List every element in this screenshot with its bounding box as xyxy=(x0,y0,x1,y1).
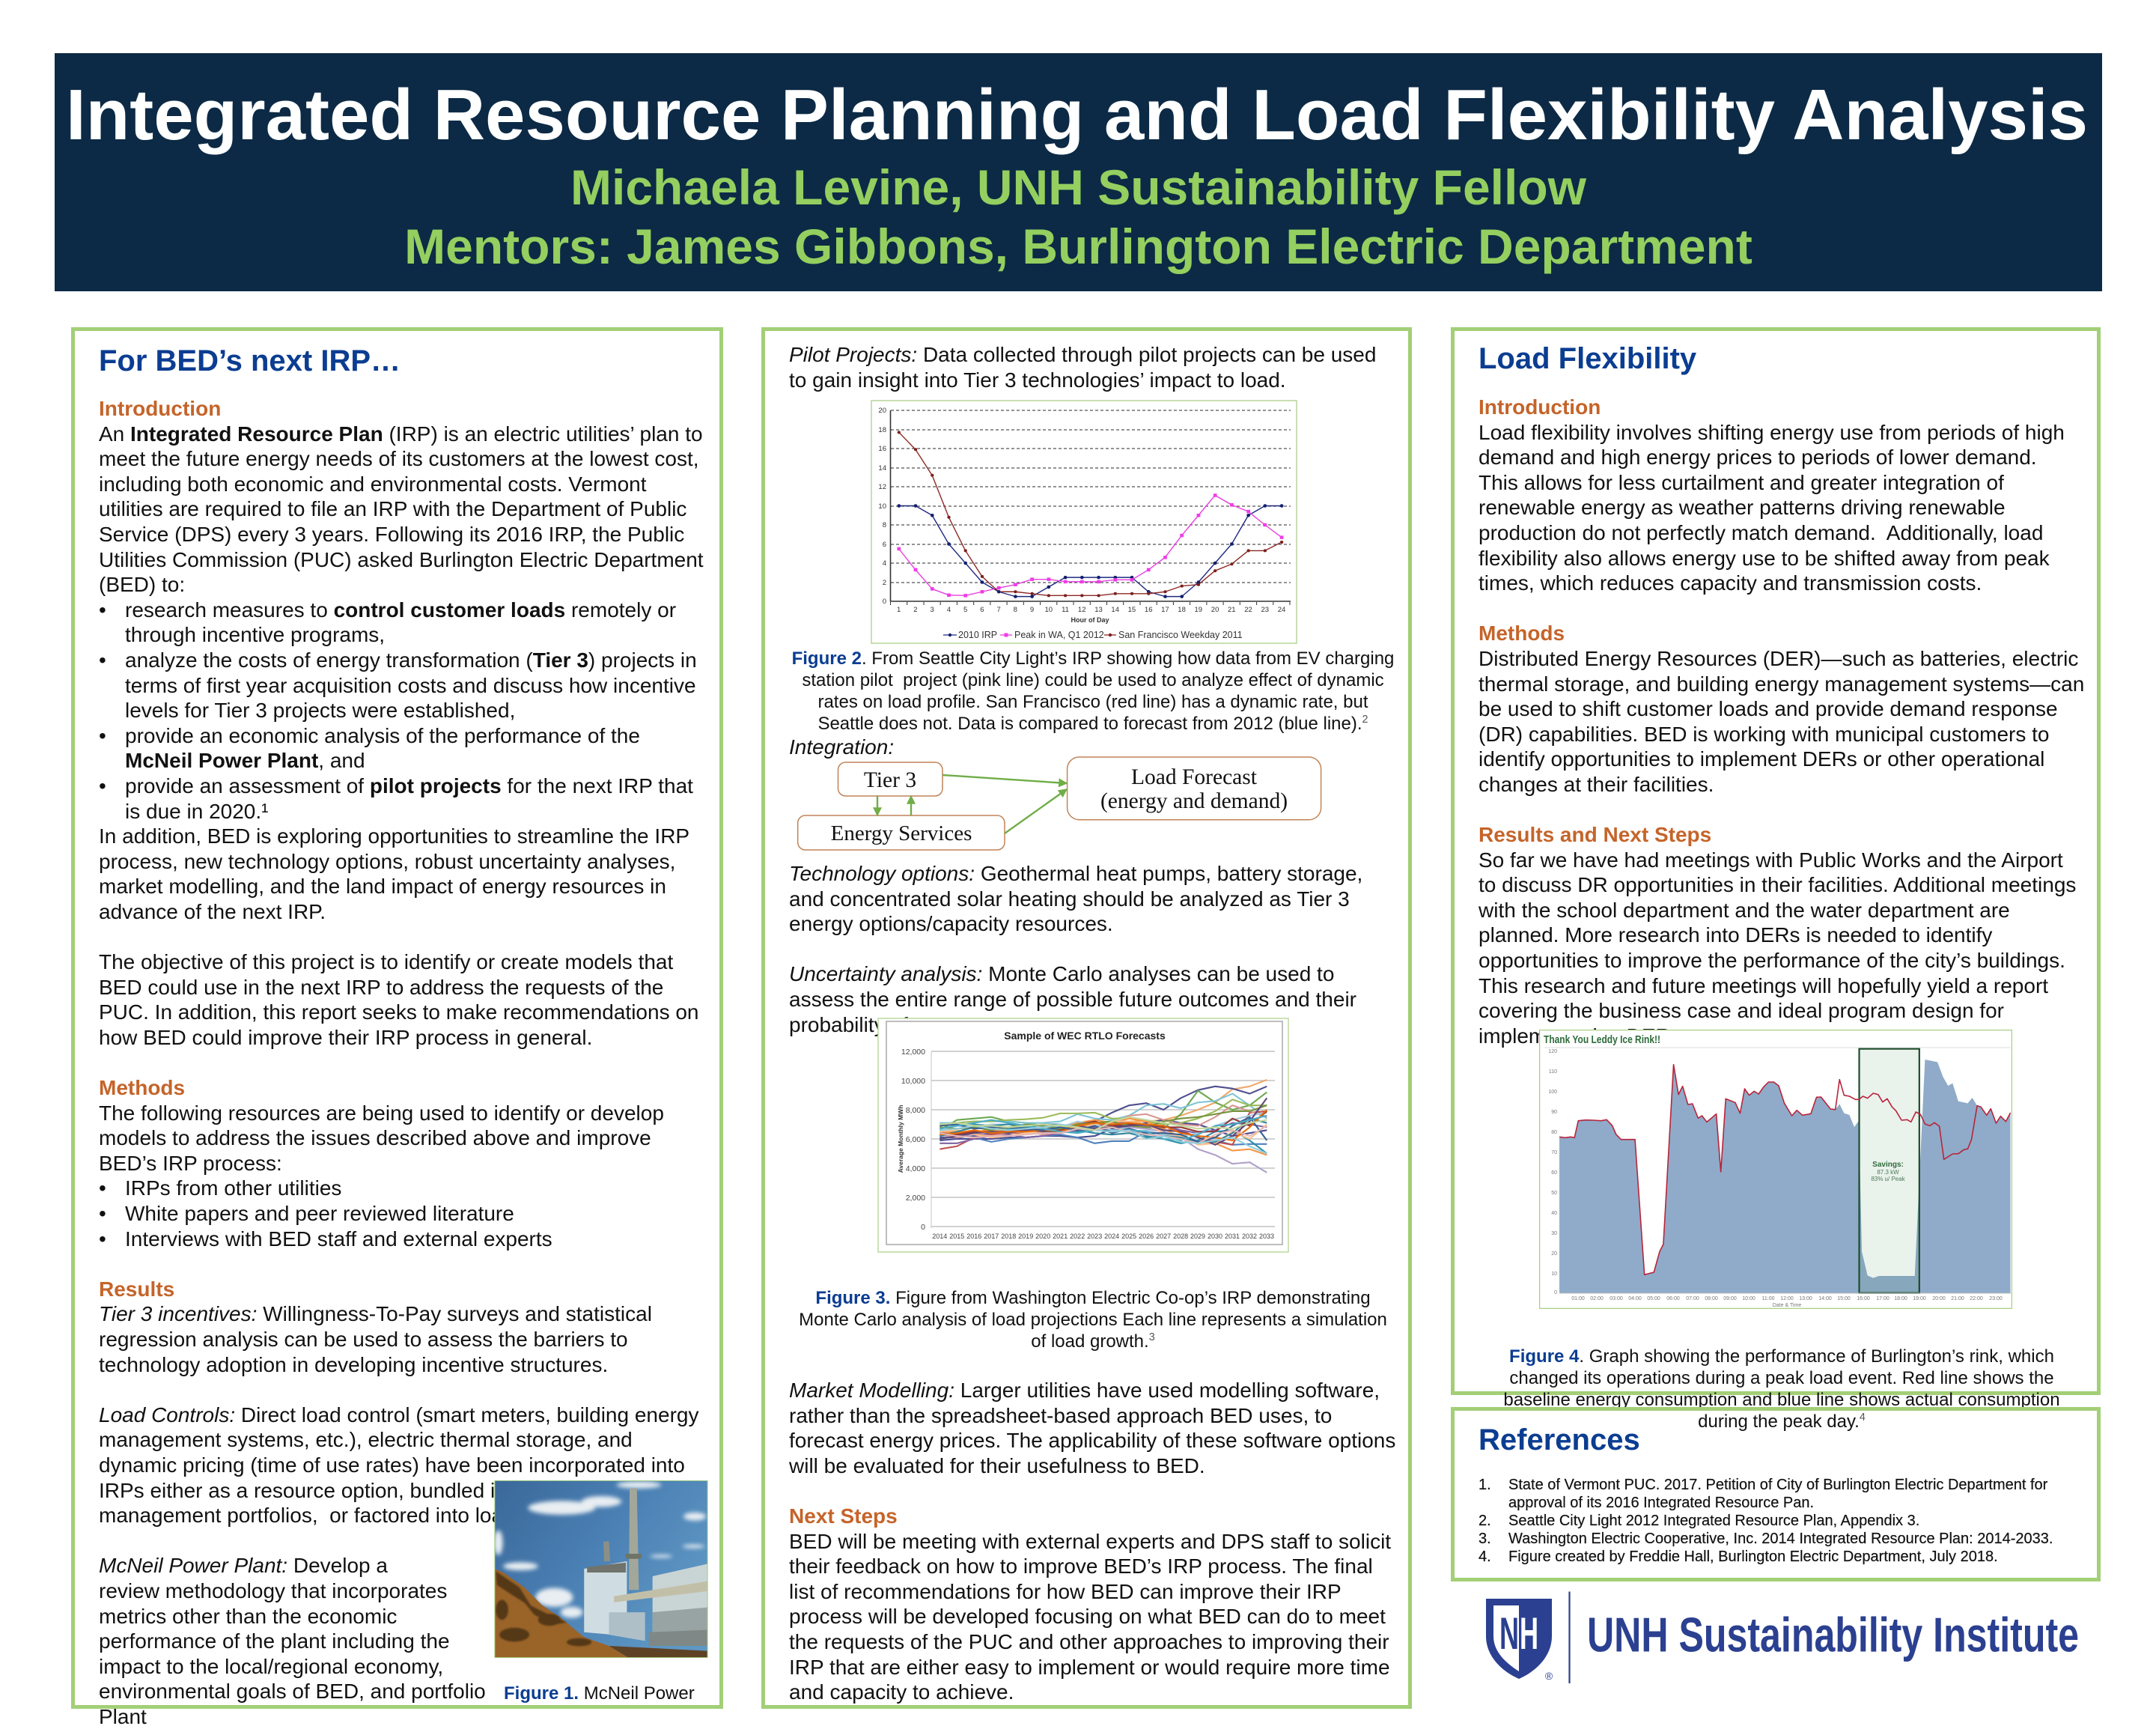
line chart: Figure 2 load profile: 17 xyxy=(1161,606,1169,614)
section: introduction: • xyxy=(99,724,106,747)
section: introduction: • xyxy=(99,648,106,672)
line chart: Figure 3 Monte Carlo forecasts: 0 xyxy=(921,1223,925,1232)
line chart: Figure 3 Monte Carlo forecasts: 2031 xyxy=(1225,1233,1240,1240)
panel: References xyxy=(1451,1407,2101,1581)
area chart: Figure 4 Leddy Ice Rink load: 20:00 xyxy=(1932,1296,1946,1301)
references list: 2. xyxy=(1479,1513,1491,1529)
line chart: Figure 3 Monte Carlo forecasts: 2019 xyxy=(1018,1233,1033,1240)
pilot projects text: Pilot Projects: Data collected through pilot projects can be used to gain insight into Tier 3 technologies’ impact to load. xyxy=(789,343,1376,392)
line chart: Figure 2 load profile: 2 xyxy=(913,606,918,614)
line chart: Figure 2 load profile: 23 xyxy=(1261,606,1269,614)
line chart: Figure 3 Monte Carlo forecasts: Average Monthly MWh xyxy=(897,1105,904,1173)
area chart: Figure 4 Leddy Ice Rink load: 30 xyxy=(1551,1231,1557,1236)
line chart: Figure 3 Monte Carlo forecasts: Sample of WEC RTLO Forecasts xyxy=(1004,1030,1166,1042)
section: results and next steps: Results and Next Steps So far we have had meetings with Public Works and the Airport to discuss DR opportunities in their facilities. Additional meetings with the school department and the water department are planned. More research into DERs is needed to identify opportunities to improve the performance of the city’s buildings. This research and future meetings will hopefully yield a report covering the business case and ideal program design for implementation DERs. xyxy=(1479,823,2076,1048)
line chart: Figure 2 load profile: 22 xyxy=(1244,606,1252,614)
line chart: Figure 3 Monte Carlo forecasts: 2020 xyxy=(1035,1233,1050,1240)
line chart: Figure 2 load profile: 10 xyxy=(1045,606,1053,614)
area chart: Figure 4 Leddy Ice Rink load: 10 xyxy=(1551,1271,1557,1277)
area chart: Figure 4 Leddy Ice Rink load: 04:00 xyxy=(1628,1296,1642,1301)
area chart: Figure 4 Leddy Ice Rink load: Date & Time xyxy=(1773,1303,1801,1308)
line chart: Figure 2 load profile: 14 xyxy=(878,464,886,472)
section: methods: Methods The following resources are being used to identify or develop models to address the issues described above and improve BED’s IRP process: IRPs from other utilities White papers and peer reviewed literature Interviews with BED staff and external experts xyxy=(99,1076,664,1251)
line chart: Figure 3 Monte Carlo forecasts: 2018 xyxy=(1001,1233,1016,1240)
line chart: Figure 2 load profile: 5 xyxy=(963,606,967,614)
author subtitle: Michaela Levine, UNH Sustainability Fellow xyxy=(570,159,1586,215)
line chart: Figure 3 Monte Carlo forecasts: 2,000 xyxy=(906,1194,925,1203)
caption: Figure 4: Figure 4. Graph showing the performance of Burlington’s rink, which changed its operations during a peak load event. Red line shows the baseline energy consumption and blue line shows actual consumption during the peak day.4 xyxy=(1503,1346,2060,1432)
box: Tier 3 xyxy=(838,762,943,796)
objective paragraph: The objective of this project is to identify or create models that BED could use in the next IRP to address the requests of the PUC. In addition, this report seeks to make recommendations on how BED could improve their IRP process in general. xyxy=(99,950,699,1049)
area chart: Figure 4 Leddy Ice Rink load: 14:00 xyxy=(1818,1296,1832,1301)
line chart: Figure 2 load profile: 2 xyxy=(883,579,886,587)
area chart: Figure 4 Leddy Ice Rink load: 50 xyxy=(1551,1191,1557,1196)
line chart: Figure 3 Monte Carlo forecasts: 6,000 xyxy=(906,1135,925,1144)
box: Load Forecast xyxy=(1068,757,1321,820)
area chart: Figure 4 Leddy Ice Rink load: 13:00 xyxy=(1799,1296,1812,1301)
references list: State of Vermont PUC. 2017. Petition of City of Burlington Electric Department for approval of its 2016 Integrated Resource Pan. Seattle City Light 2012 Integrated Resource Plan, Appendix 3. Washington Electric Cooperative, Inc. 2014 Integrated Resource Plan: 2014-2033. Figure created by Freddie Hall, Burlington Electric Department, July 2018. xyxy=(1508,1477,2053,1565)
area chart: Figure 4 Leddy Ice Rink load: 23:00 xyxy=(1989,1296,2003,1301)
area chart: Figure 4 Leddy Ice Rink load: 05:00 xyxy=(1647,1296,1660,1301)
area chart: Figure 4 Leddy Ice Rink load: 10:00 xyxy=(1742,1296,1755,1301)
area chart: Figure 4 Leddy Ice Rink load: 19:00 xyxy=(1913,1296,1926,1301)
area chart: Figure 4 Leddy Ice Rink load: 21:00 xyxy=(1951,1296,1964,1301)
area chart: Figure 4 Leddy Ice Rink load: 80 xyxy=(1551,1130,1557,1135)
technology and uncertainty text: Technology options: Geothermal heat pumps, battery storage, and concentrated solar heating should be analyzed as Tier 3 energy options/capacity resources. Uncertainty analysis: Monte Carlo analyses can be used to assess the entire range of possible future outcomes and their probability of occurrence. xyxy=(789,862,1362,1036)
section: methods: Methods Distributed Energy Resources (DER)—such as batteries, electric thermal storage, and building energy management systems—can be used to shift customer loads and provide demand response (DR) capabilities. BED is working with municipal customers to identify opportunities to implement DERs or other operational changes at their facilities. xyxy=(1479,622,2084,796)
line chart: Figure 2 load profile: 1 xyxy=(897,606,901,614)
area chart: Figure 4 Leddy Ice Rink load: 70 xyxy=(1551,1150,1557,1155)
line chart: Figure 3 Monte Carlo forecasts: 2027 xyxy=(1156,1233,1171,1240)
line chart: Figure 2 load profile: 18 xyxy=(1178,606,1186,614)
area chart: Figure 4 Leddy Ice Rink load: Savings: xyxy=(1872,1161,1904,1169)
area chart: Figure 4 Leddy Ice Rink load: 0 xyxy=(1554,1290,1557,1295)
line chart: Figure 2 load profile: 12 xyxy=(1078,606,1085,614)
panel: For BED's next IRP xyxy=(71,327,723,1709)
line chart: Figure 2 load profile: Hour of Day xyxy=(1071,616,1109,624)
market modelling and next steps text xyxy=(789,1379,1395,1704)
line chart: Figure 3 Monte Carlo forecasts: 10,000 xyxy=(901,1077,925,1086)
market modelling paragraph: Market Modelling: Larger utilities have used modelling software, rather than the spreadsheet-based approach BED uses, to forecast energy prices. The applicability of these software options will be evaluated for their usefulness to BED. xyxy=(789,1379,1395,1477)
caption: Figure 3: Figure 3. Figure from Washington Electric Co-op’s IRP demonstrating Monte Carlo analysis of load projections Each line represents a simulation of load growth.3 xyxy=(799,1288,1387,1352)
area chart: Figure 4 Leddy Ice Rink load: 06:00 xyxy=(1666,1296,1680,1301)
heading: References: References xyxy=(1479,1423,1640,1456)
section: introduction: • xyxy=(99,598,106,622)
line chart: Figure 2 load profile: 18 xyxy=(878,426,886,434)
box: Load Forecast: Load Forecast xyxy=(1131,765,1258,789)
line chart: Figure 2 load profile: 4 xyxy=(947,606,951,614)
line chart: Figure 2 load profile: 13 xyxy=(1094,606,1103,614)
panel: Load Flexibility xyxy=(1451,327,2101,1395)
baseline consumption line xyxy=(1559,1065,2011,1274)
area chart: Figure 4 Leddy Ice Rink load: 83% u/ Peak xyxy=(1871,1176,1906,1182)
section: methods: • xyxy=(99,1227,106,1251)
left column text xyxy=(99,397,704,1728)
line chart: Figure 2 load profile: 14 xyxy=(1111,606,1119,614)
line chart: Figure 3 Monte Carlo forecasts: 4,000 xyxy=(906,1164,925,1173)
line chart: Figure 3 Monte Carlo forecasts: 2029 xyxy=(1190,1233,1205,1240)
peak event highlight xyxy=(1860,1049,1919,1293)
line chart: Figure 3 Monte Carlo forecasts: 2023 xyxy=(1087,1233,1102,1240)
McNeil paragraph: McNeil Power Plant: Develop a review methodology that incorporates metrics other than the economic performance of the plant including the impact to the local/regional economy, environmental goals of BED, and portfolio Plant xyxy=(99,1554,486,1728)
line chart: Figure 2 load profile: 20 xyxy=(1211,606,1219,614)
area chart: Figure 4 Leddy Ice Rink load: 01:00 xyxy=(1571,1296,1585,1301)
area chart: Figure 4 Leddy Ice Rink load: 60 xyxy=(1551,1170,1557,1176)
title: Integrated Resource Planning and Load Flexibility Analysis xyxy=(66,75,2088,155)
line chart: Figure 3 Monte Carlo forecasts: 2024 xyxy=(1104,1233,1119,1240)
area chart: Figure 4 Leddy Ice Rink load: 20 xyxy=(1551,1251,1557,1257)
line chart: Figure 2 load profile: 4 xyxy=(883,559,886,568)
line chart: Figure 2 load profile: 12 xyxy=(878,483,886,491)
area chart: Figure 4 Leddy Ice Rink load: 87.3 kW xyxy=(1877,1169,1899,1176)
load flexibility text xyxy=(1479,395,2084,1048)
area chart: Figure 4 Leddy Ice Rink load: 110 xyxy=(1549,1069,1557,1075)
line chart: Figure 3 Monte Carlo forecasts: 2025 xyxy=(1121,1233,1136,1240)
section: methods: • xyxy=(99,1202,106,1225)
box: Energy Services xyxy=(798,815,1005,850)
box: Energy Services: Energy Services xyxy=(831,821,972,845)
line chart: Figure 2 load profile: 9 xyxy=(1030,606,1034,614)
line chart: Figure 2 load profile: San Francisco Weekday 2011 xyxy=(1118,630,1243,640)
area chart: Figure 4 Leddy Ice Rink load: 07:00 xyxy=(1686,1296,1699,1301)
logo: UNH Sustainability Institute xyxy=(1486,1592,2079,1683)
area chart: Figure 4 Leddy Ice Rink load: Thank You Leddy Ice Rink!! xyxy=(1544,1033,1660,1046)
line chart: Figure 2 load profile: 8 xyxy=(883,521,886,529)
line chart: Figure 2 load profile: 8 xyxy=(1014,606,1017,614)
line chart: Figure 3 Monte Carlo forecasts: 8,000 xyxy=(906,1106,925,1115)
line chart: Figure 2 load profile: 24 xyxy=(1278,606,1285,614)
section: results: Results Tier 3 incentives: Willingness-To-Pay surveys and statistical regression analysis can be used to assess the barriers to technology adoption in developing incentive structures. xyxy=(99,1277,652,1376)
heading: For BED's next IRP: For BED’s next IRP… xyxy=(99,344,401,377)
caption: Figure 2: Figure 2. From Seattle City Light’s IRP showing how data from EV charging station pilot project (pink line) could be used to analyze effect of dynamic rates on load profile. San Francisco (red line) has a dynamic rate, but Seattle does not. Data is compared to forecast from 2012 (blue line).2 xyxy=(792,648,1394,734)
line chart: Figure 2 load profile: 21 xyxy=(1228,606,1236,614)
area chart: Figure 4 Leddy Ice Rink load: 18:00 xyxy=(1894,1296,1907,1301)
line chart: Figure 3 Monte Carlo forecasts: 2022 xyxy=(1070,1233,1085,1240)
line chart: Figure 2 load profile: 7 xyxy=(996,606,1001,614)
actual consumption area xyxy=(1559,1060,2011,1293)
area chart: Figure 4 Leddy Ice Rink load: 22:00 xyxy=(1970,1296,1983,1301)
section: introduction: Introduction An Integrated Resource Plan (IRP) is an electric utilities’ plan to meet the future energy needs of its customers at the lowest cost, including both economic and environmental costs. Vermont utilities are required to file an IRP with the Department of Public Service (DPS) every 3 years. Following its 2016 IRP, the Public Utilities Commission (PUC) asked Burlington Electric Department (BED) to: research measures to control customer loads remotely or through incentive programs, analyze the costs of energy transformation (Tier 3) projects in terms of first year acquisition costs and discuss how incentive levels for Tier 3 projects were established, provide an economic analysis of the performance of the McNeil Power Plant, and provide an assessment of pilot projects for the next IRP that is due in 2020.¹ In addition, BED is exploring opportunities to streamline the IRP process, new technology options, robust uncertainty analyses, market modelling, and the land impact of energy resources in advance of the next IRP. xyxy=(99,397,704,923)
area chart: Figure 4 Leddy Ice Rink load: 16:00 xyxy=(1857,1296,1870,1301)
line chart: Figure 2 load profile: 10 xyxy=(878,502,886,511)
line chart: Figure 3 Monte Carlo forecasts: 2016 xyxy=(966,1233,981,1240)
references list: 3. xyxy=(1479,1531,1491,1547)
line chart: Figure 2 load profile: 19 xyxy=(1195,606,1202,614)
references list: 1. xyxy=(1479,1477,1491,1493)
section: methods: • xyxy=(99,1176,106,1200)
area chart: Figure 4 Leddy Ice Rink load: 17:00 xyxy=(1876,1296,1889,1301)
line chart: Figure 2 load profile: 15 xyxy=(1128,606,1136,614)
line chart: Figure 2 load profile: 6 xyxy=(883,541,886,549)
line chart: Figure 2 load profile xyxy=(871,400,1297,644)
line chart: Figure 3 Monte Carlo forecasts: 2033 xyxy=(1259,1233,1274,1240)
panel: pilot projects and integration xyxy=(761,327,1412,1709)
line chart: Figure 3 Monte Carlo forecasts xyxy=(877,1018,1289,1253)
line chart: Figure 2 load profile: 16 xyxy=(1145,606,1152,614)
area chart: Figure 4 Leddy Ice Rink load: 03:00 xyxy=(1610,1296,1623,1301)
line chart: Figure 3 Monte Carlo forecasts: 2032 xyxy=(1242,1233,1257,1240)
line chart: Figure 3 Monte Carlo forecasts: 12,000 xyxy=(901,1048,925,1057)
line chart: Figure 3 Monte Carlo forecasts: 2028 xyxy=(1173,1233,1188,1240)
arrows between boxes xyxy=(877,775,1067,833)
integration label: Integration: xyxy=(789,735,894,759)
section: introduction: • xyxy=(99,774,106,797)
section: introduction: Introduction Load flexibility involves shifting energy use from periods of high demand and high energy prices to periods of lower demand. This allows for less curtailment and greater integration of renewable energy as weather patterns driving renewable production do not perfectly match demand. Additionally, load flexibility also allows energy use to be shifted away from peak times, which reduces capacity and transmission costs. xyxy=(1479,395,2065,595)
line chart: Figure 2 load profile: 3 xyxy=(931,606,934,614)
photo: McNeil Power Plant xyxy=(494,1480,708,1658)
mentors subtitle: Mentors: James Gibbons, Burlington Electric Department xyxy=(404,219,1752,274)
area chart: Figure 4 Leddy Ice Rink load: 90 xyxy=(1551,1110,1557,1115)
icon: UNH shield xyxy=(1486,1599,1553,1682)
icon: UNH shield: ® xyxy=(1545,1670,1553,1682)
box: Load Forecast: (energy and demand) xyxy=(1100,789,1288,813)
load controls paragraph: Load Controls: Direct load control (smart meters, building energy management systems, etc.), electric thermal storage, and dynamic pricing (time of use rates) have been incorporated into IRPs either as a resource option, bundled into demand management portfolios, or factored into load xyxy=(99,1403,698,1527)
area chart: Figure 4 Leddy Ice Rink load: 120 xyxy=(1548,1049,1557,1054)
line chart: Figure 2 load profile: 20 xyxy=(878,407,886,415)
box: Tier 3: Tier 3 xyxy=(864,768,916,792)
line chart: Figure 3 Monte Carlo forecasts: 2017 xyxy=(984,1233,999,1240)
line chart: Figure 2 load profile: 6 xyxy=(980,606,984,614)
line chart: Figure 3 Monte Carlo forecasts: 2030 xyxy=(1208,1233,1222,1240)
icon: UNH shield: N xyxy=(1499,1608,1519,1659)
area chart: Figure 4 Leddy Ice Rink load xyxy=(1539,1030,2012,1309)
line chart: Figure 3 Monte Carlo forecasts: 2021 xyxy=(1053,1233,1068,1240)
next steps section: Next Steps BED will be meeting with external experts and DPS staff to solicit their feedback on how to improve BED’s IRP process. The final list of recommendations for how BED can improve their IRP process will be developed focusing on what BED can do to meet the requests of the PUC and other approaches to improving their IRP that are either easy to implement or would require more time and capacity to achieve. xyxy=(789,1504,1391,1704)
line chart: Figure 2 load profile: 16 xyxy=(878,445,886,453)
area chart: Figure 4 Leddy Ice Rink load: 15:00 xyxy=(1837,1296,1851,1301)
line chart: Figure 3 Monte Carlo forecasts: 2014 xyxy=(932,1233,947,1240)
line chart: Figure 2 load profile: 11 xyxy=(1062,606,1069,614)
area chart: Figure 4 Leddy Ice Rink load: 11:00 xyxy=(1762,1296,1775,1301)
line chart: Figure 3 Monte Carlo forecasts: 2015 xyxy=(949,1233,964,1240)
line chart: Figure 2 load profile: 0 xyxy=(883,598,886,606)
area chart: Figure 4 Leddy Ice Rink load: 02:00 xyxy=(1590,1296,1604,1301)
flow diagram: Integration xyxy=(797,756,1322,851)
line chart: Figure 2 load profile: 2010 IRP xyxy=(958,630,997,640)
area chart: Figure 4 Leddy Ice Rink load: 08:00 xyxy=(1705,1296,1718,1301)
icon: UNH shield: H xyxy=(1520,1608,1538,1659)
heading: Load Flexibility: Load Flexibility xyxy=(1479,342,1696,375)
line chart: Figure 2 load profile: Peak in WA, Q1 2012 xyxy=(1014,630,1104,640)
area chart: Figure 4 Leddy Ice Rink load: 100 xyxy=(1548,1090,1557,1095)
references list: 4. xyxy=(1479,1549,1491,1565)
caption: Figure 1: Figure 1. McNeil Power xyxy=(504,1683,695,1704)
area chart: Figure 4 Leddy Ice Rink load: 09:00 xyxy=(1723,1296,1737,1301)
area chart: Figure 4 Leddy Ice Rink load: 40 xyxy=(1551,1211,1557,1216)
header band xyxy=(55,53,2102,291)
area chart: Figure 4 Leddy Ice Rink load: 12:00 xyxy=(1780,1296,1794,1301)
line chart: Figure 3 Monte Carlo forecasts: 2026 xyxy=(1139,1233,1154,1240)
